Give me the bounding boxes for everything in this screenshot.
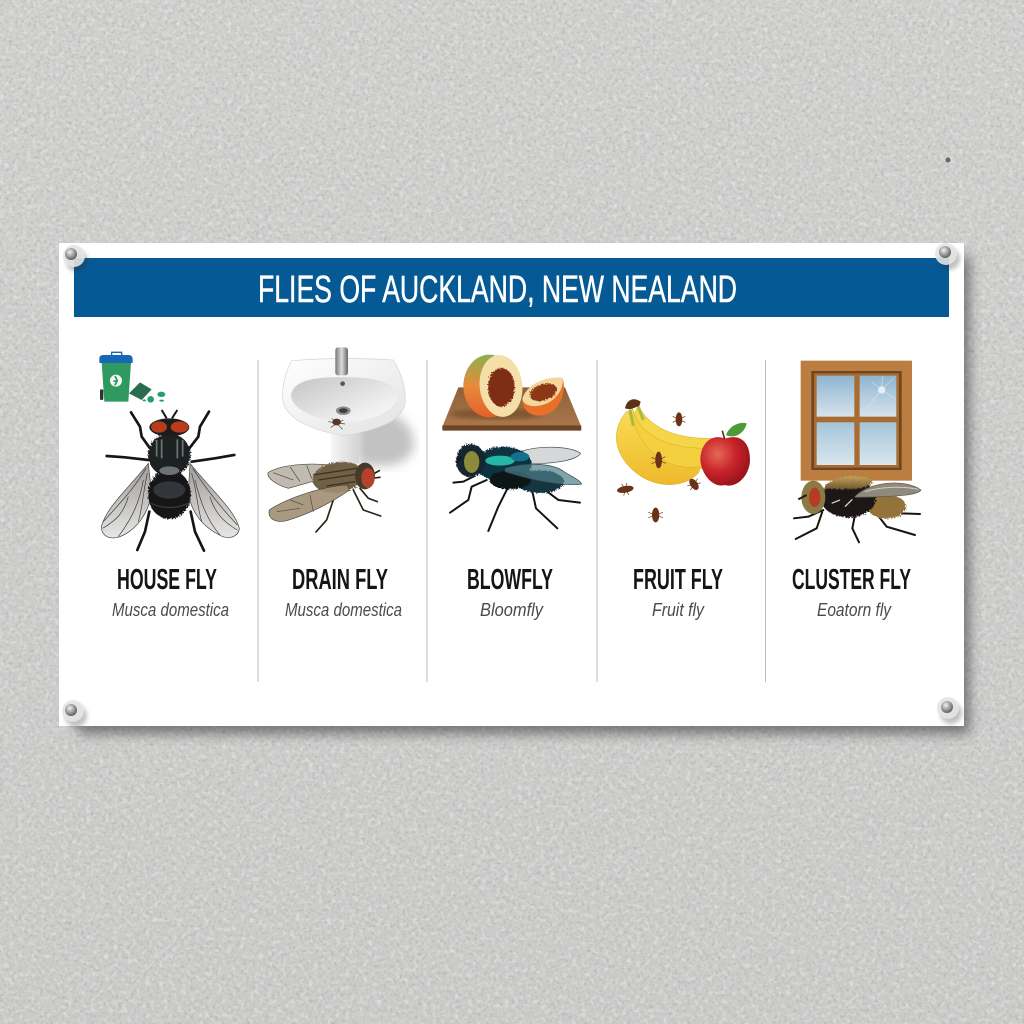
label: drain fly: DRAIN FLY bbox=[292, 564, 388, 596]
icon: wheelie bin with spilled rubbish bbox=[99, 352, 165, 403]
column dividers bbox=[258, 360, 766, 682]
panel shadow bbox=[78, 256, 970, 734]
panel: house fly bbox=[99, 352, 239, 620]
label: cluster fly: CLUSTER FLY bbox=[792, 564, 911, 596]
panel: drain fly bbox=[268, 347, 414, 620]
icon: wash basin bbox=[283, 347, 414, 466]
species name: Musca domestica bbox=[112, 600, 229, 620]
icon: wooden window bbox=[801, 361, 912, 481]
label: fruit fly: FRUIT FLY bbox=[633, 564, 723, 596]
panel: fruit fly bbox=[616, 399, 750, 620]
icon: cluster fly bbox=[794, 476, 921, 542]
icon: bananas and apple bbox=[616, 399, 750, 522]
icon: drain fly bbox=[268, 459, 381, 532]
icon: blowfly bbox=[450, 444, 582, 531]
species name: Bloomfly bbox=[480, 600, 544, 620]
mounting pins bbox=[62, 243, 962, 727]
label: blowfly: BLOWFLY bbox=[467, 564, 553, 596]
label: house fly: HOUSE FLY bbox=[117, 564, 217, 596]
panel: cluster fly bbox=[792, 361, 921, 620]
panel: blowfly bbox=[442, 353, 582, 620]
white sign panel bbox=[59, 243, 964, 726]
species name: Fruit fly bbox=[652, 600, 705, 620]
species name: Eoatorn fly bbox=[817, 600, 892, 620]
icon: cut fruit on board bbox=[442, 353, 581, 431]
title banner bbox=[74, 258, 949, 317]
species name: Musca domestica bbox=[285, 600, 402, 620]
title: FLIES OF AUCKLAND, NEW NEALAND bbox=[258, 269, 737, 311]
icon: house fly bbox=[101, 410, 239, 551]
